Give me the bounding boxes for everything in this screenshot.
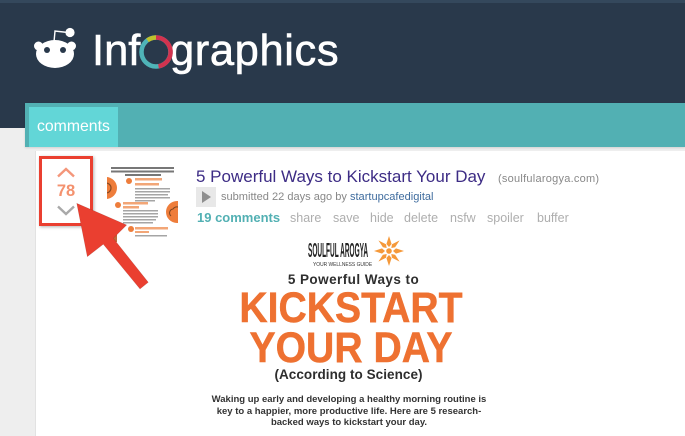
infographic subtitle: (According to Science) — [274, 367, 423, 382]
brand tagline: YOUR WELLNESS GUIDE — [313, 262, 372, 268]
intro paragraph: backed ways to kickstart your day. — [271, 417, 427, 428]
action links: spoiler — [487, 211, 524, 225]
infographic title: KICKSTART — [239, 284, 463, 332]
page background — [0, 128, 685, 436]
tab: comments — [29, 107, 118, 147]
upvote arrow — [57, 168, 75, 178]
logo: wordmark: Inf — [92, 27, 140, 75]
infographic title — [239, 284, 463, 372]
action links: buffer — [537, 211, 569, 225]
post title: 5 Powerful Ways to Kickstart Your Day — [196, 167, 485, 186]
content panel — [35, 151, 685, 436]
post thumbnail — [107, 167, 178, 242]
intro paragraph: Waking up early and developing a healthy morning routine is — [212, 394, 486, 405]
infographic heading: 5 Powerful Ways to — [288, 272, 419, 287]
vote count: 78 — [57, 182, 75, 200]
logo: snoo icon — [34, 28, 76, 68]
post domain: (soulfularogya.com) — [498, 173, 599, 185]
infographic title: YOUR DAY — [250, 324, 452, 372]
action links: nsfw — [450, 211, 476, 225]
tab: comments: comments — [37, 118, 110, 135]
intro paragraph — [212, 394, 486, 428]
red highlight box — [39, 156, 93, 226]
submission line: submitted 22 days ago by startupcafedigital — [221, 191, 433, 203]
action links: delete — [404, 211, 438, 225]
expand button — [196, 187, 216, 207]
action links: share — [290, 211, 321, 225]
action links: 19 comments — [197, 210, 280, 225]
brand name: SOULFUL AROGYA — [308, 240, 368, 262]
logo: donut letter o — [139, 35, 173, 69]
action links: save — [333, 211, 359, 225]
teal navigation bar — [25, 103, 685, 147]
action links: hide — [370, 211, 394, 225]
action links — [197, 210, 569, 225]
vote widget — [57, 168, 75, 216]
brand logo: Soulful Arogya — [308, 236, 404, 266]
logo: wordmark — [92, 27, 339, 75]
brand sun icon — [374, 236, 404, 266]
header banner — [0, 0, 685, 128]
red arrow — [76, 203, 148, 290]
logo: wordmark: graphics — [170, 27, 339, 75]
downvote arrow — [57, 206, 75, 216]
intro paragraph: key to a happier, more productive life. Here are 5 research- — [217, 406, 481, 417]
